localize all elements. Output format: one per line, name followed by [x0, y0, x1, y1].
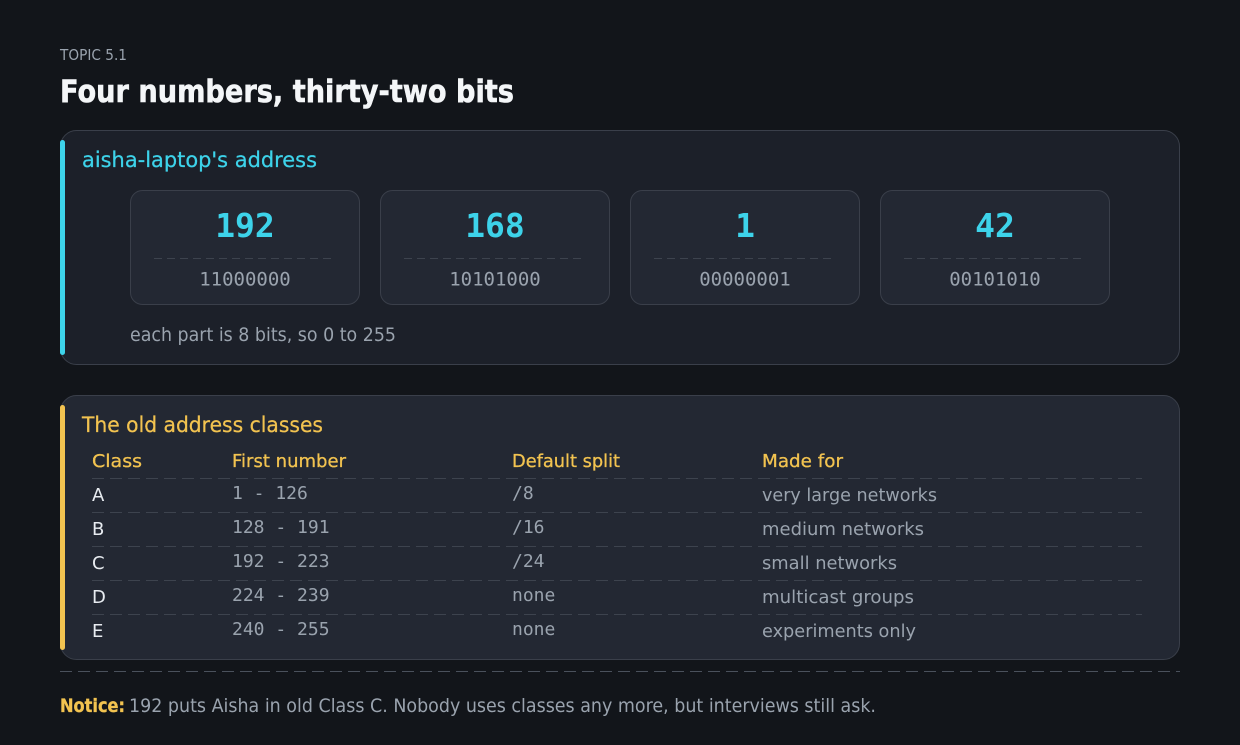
octet card: 42	[880, 190, 1110, 304]
panel: aisha-laptop's address	[60, 130, 1180, 364]
row: class D: multicast groups	[762, 587, 914, 608]
table header: Made for	[762, 451, 844, 472]
row: class E: experiments only	[762, 621, 916, 642]
table header: Class	[92, 451, 142, 472]
row: class B: medium networks	[762, 519, 924, 540]
octet card: 168	[380, 190, 610, 304]
octet card: 192: 192	[215, 206, 275, 245]
row: class A: A	[92, 485, 105, 506]
row: class E	[92, 619, 916, 642]
row: class A: very large networks	[762, 485, 937, 506]
octet card: 42: 00101010	[949, 268, 1041, 290]
row: class C: C	[92, 553, 105, 574]
row: class B: B	[92, 519, 104, 540]
row: class A: /8	[512, 483, 534, 504]
row: class E: E	[92, 621, 103, 642]
row: class A	[92, 483, 937, 506]
accent bar: cyan	[60, 140, 65, 355]
row: class B: /16	[512, 517, 545, 538]
octet card: 1: 00000001	[699, 268, 791, 290]
panel heading: classes: The old address classes	[81, 413, 323, 437]
accent bar: yellow	[60, 405, 65, 650]
octet card: 1: 1	[735, 206, 755, 245]
octet card: 192: 11000000	[199, 268, 291, 290]
octet card: 192	[130, 190, 360, 304]
row: class D: D	[92, 587, 106, 608]
row: class E: none	[512, 619, 555, 640]
table header	[92, 451, 844, 472]
title: Four numbers, thirty-two bits	[60, 74, 514, 110]
row: class C: small networks	[762, 553, 897, 574]
table header: Default split	[512, 451, 620, 472]
table: address classes	[92, 451, 1142, 642]
row: class E: 240 - 255	[232, 619, 330, 640]
row: class C: 192 - 223	[232, 551, 330, 572]
notice: Notice:	[60, 695, 125, 717]
row: class D: 224 - 239	[232, 585, 330, 606]
row: class C: /24	[512, 551, 545, 572]
row: class C	[92, 551, 897, 574]
table header: First number	[232, 451, 347, 472]
topic label: TOPIC 5.1	[59, 46, 127, 64]
row: class B: 128 - 191	[232, 517, 330, 538]
panel: old address classes	[60, 396, 1180, 660]
octet card: 168: 10101000	[449, 268, 541, 290]
row: class A: 1 - 126	[232, 483, 308, 504]
octet card: 1	[630, 190, 860, 304]
row: class B	[92, 517, 924, 540]
notice: 192 puts Aisha in old Class C. Nobody uses classes any more, but interviews still ask.	[129, 695, 876, 717]
octet card: 42: 42	[975, 206, 1015, 245]
row: class D	[92, 585, 914, 608]
panel heading: address: aisha-laptop's address	[82, 148, 317, 172]
row: class D: none	[512, 585, 555, 606]
caption: octet range: each part is 8 bits, so 0 to 255	[130, 324, 396, 346]
octet card: 168: 168	[465, 206, 525, 245]
